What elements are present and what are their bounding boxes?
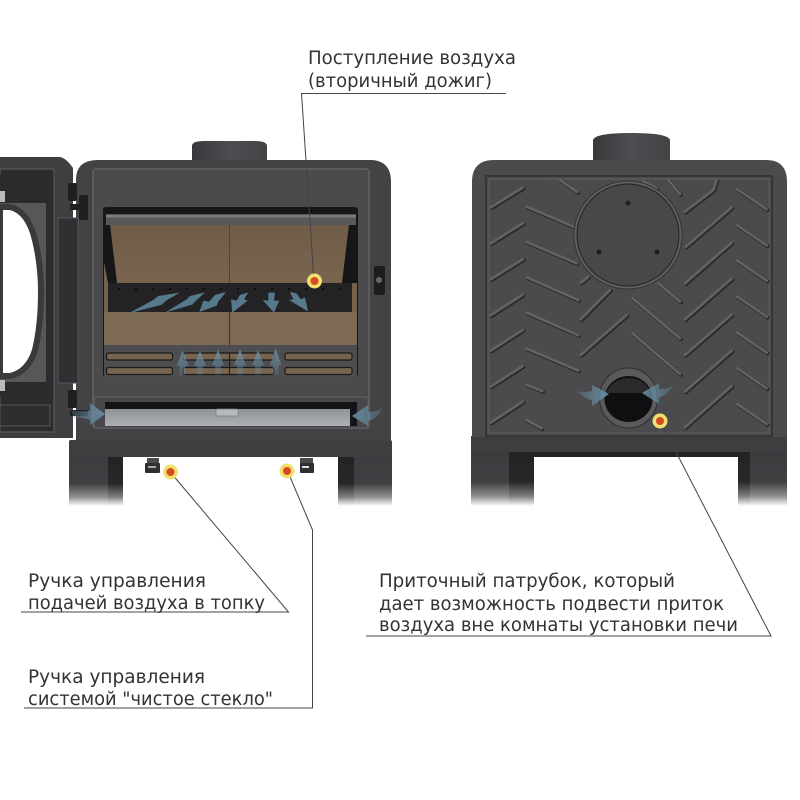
upper door hinge <box>68 183 88 220</box>
callout: secondary air <box>302 48 516 281</box>
rear casting panel <box>486 176 772 436</box>
lower firebricks <box>104 312 357 346</box>
leader line to right handle <box>24 472 312 708</box>
door glass opening <box>0 207 41 376</box>
left control handle <box>145 458 160 473</box>
stand top plate <box>69 440 392 457</box>
marker: left handle <box>163 464 178 480</box>
stove body <box>76 160 391 441</box>
firebox opening <box>103 207 358 377</box>
marker: right handle <box>280 464 294 478</box>
label: clean glass handle: Ручка управления <box>28 667 205 688</box>
ash drawer recess and drawer <box>94 397 368 428</box>
label: firebox air handle: Ручка управления <box>28 571 206 592</box>
inlet left arrow <box>577 385 609 406</box>
side latch <box>374 266 385 295</box>
glass clips <box>0 191 5 391</box>
label: inlet pipe: Приточный патрубок, который <box>379 571 675 592</box>
front casting panel <box>93 169 369 428</box>
open door <box>0 157 78 438</box>
label: secondary air: (вторичный дожиг) <box>308 71 492 92</box>
herringbone ribs <box>491 179 768 429</box>
rear body <box>472 160 787 437</box>
front stove with open door <box>0 141 392 506</box>
rear stand plate <box>471 436 787 457</box>
secondary air arrows <box>128 292 308 313</box>
air channel bar with holes <box>108 283 352 312</box>
side bricks <box>104 262 357 312</box>
primary air arrows through grate <box>177 349 282 375</box>
rear left leg <box>471 452 534 506</box>
label: clean glass handle: системой "чистое стекло" <box>28 689 273 710</box>
callout: inlet pipe <box>366 421 771 636</box>
label: inlet pipe: дает возможность подвести приток <box>379 594 724 615</box>
rear stove view <box>471 133 787 506</box>
right stand leg <box>338 456 392 506</box>
label: firebox air handle: подачей воздуха в топку <box>28 593 265 614</box>
leader line to inlet pipe <box>366 421 771 636</box>
callout: clean glass handle <box>24 472 312 710</box>
marker: secondary air <box>307 274 322 288</box>
right drawer air arrow <box>352 405 382 426</box>
grate with slots <box>104 345 357 377</box>
baffle plate <box>106 214 356 225</box>
flue collar, front view <box>192 141 267 160</box>
rear air inlet pipe <box>600 368 658 428</box>
leader line to secondary air <box>302 94 506 281</box>
marker: inlet pipe <box>652 414 668 428</box>
right control handle <box>300 458 314 473</box>
left drawer air arrow <box>71 403 105 425</box>
flue collar, rear view <box>593 133 670 160</box>
round rear plate <box>574 181 682 289</box>
leader line to left handle <box>21 473 288 612</box>
inlet right arrow <box>642 383 674 404</box>
upper firebricks <box>110 224 349 283</box>
label: secondary air: Поступление воздуха <box>308 48 516 69</box>
inner panel frame <box>489 179 769 433</box>
label: inlet pipe: воздуха вне комнаты установки печи <box>379 615 738 636</box>
lower door hinge <box>68 390 88 416</box>
left stand leg <box>69 456 123 506</box>
callout: firebox air handle <box>21 473 288 614</box>
rear right leg <box>738 452 787 506</box>
